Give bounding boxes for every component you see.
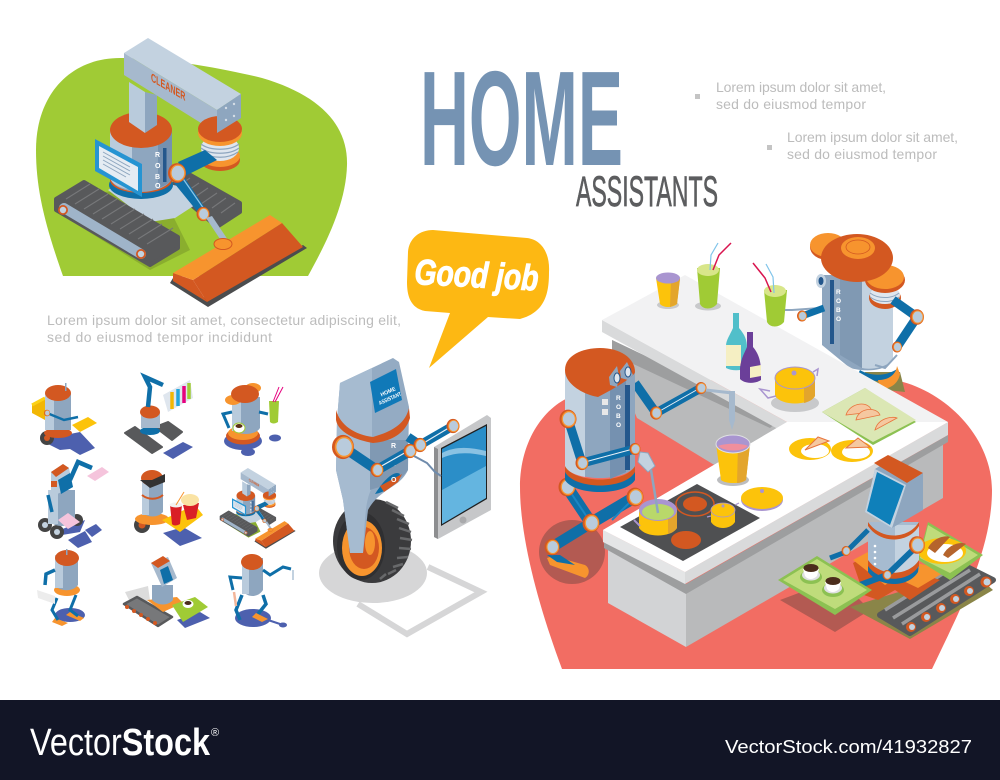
label: CLEANER: CLEANER [151, 70, 186, 104]
pot lid [741, 487, 783, 511]
registered mark: ® [211, 727, 219, 739]
screen label: HOME [380, 386, 397, 398]
ROBO label: O [616, 422, 621, 429]
plates with sandwiches [789, 437, 873, 462]
text block: top note 2: sed do eiusmod tempor [787, 146, 937, 162]
red blob [520, 380, 992, 669]
text block: left description: Lorem ipsum dolor sit amet, consectetur adipiscing elit, [47, 312, 401, 328]
image id: VectorStock.com/41932827 [725, 737, 972, 757]
text block: left description [47, 312, 401, 345]
panel: kitchen scene on red blob [520, 233, 993, 669]
screen label: ASSISTANT [378, 391, 403, 407]
robot: bartender: O [836, 298, 841, 305]
shadow [319, 543, 481, 634]
robot: waiter on tracks [778, 455, 993, 639]
panel: cleaner robot on green blob [36, 38, 347, 307]
text block: top note 2 [767, 129, 958, 162]
counter [602, 275, 948, 647]
small robot: drink server [223, 383, 283, 456]
cleaner robot: B [155, 174, 160, 181]
text block: top note 2: Lorem ipsum dolor sit amet, [787, 129, 958, 145]
small robot: medical [38, 462, 109, 548]
soup pot [634, 499, 677, 536]
robot: bartender: B [836, 307, 841, 314]
cutting board [822, 388, 916, 445]
drinks [656, 243, 824, 326]
robot: bartender: R [836, 289, 841, 296]
cleaner robot [56, 38, 307, 307]
arms [332, 419, 460, 477]
callout: Good job speech bubble [407, 230, 549, 368]
ROBO label: B [616, 413, 621, 420]
subtitle: ASSISTANTS: ASSISTANTS [576, 168, 718, 216]
ROBO label: O [391, 477, 397, 484]
text block: top note 1: Lorem ipsum dolor sit amet, [716, 79, 886, 95]
text block: left description: sed do eiusmod tempor incididunt [47, 329, 272, 345]
robot: home assistant with tablet [319, 358, 491, 634]
robot: bartender: O [836, 316, 841, 323]
ROBO label: O [616, 404, 621, 411]
tablet screen [95, 139, 142, 197]
title: HOME: HOME [420, 43, 623, 194]
icon grid: nine small robots [32, 377, 296, 628]
VectorStock logo: VectorStock [30, 722, 211, 764]
robot: bartender [810, 233, 924, 392]
text block: top note 1: sed do eiusmod tempor [716, 96, 866, 112]
ROBO label: B [391, 461, 396, 468]
cleaner robot: R [155, 152, 160, 159]
small robot: paper delivery [32, 383, 97, 455]
small robot: walking chef [230, 554, 293, 628]
small robot: test tubes [125, 377, 193, 459]
robot shadow [539, 520, 605, 584]
footer bar [0, 700, 1000, 780]
ROBO label [616, 395, 621, 429]
wheel [333, 499, 412, 583]
bottles [726, 313, 761, 383]
text block: top note 1 [695, 79, 886, 112]
large juice cup [716, 435, 750, 486]
yellow pot [760, 367, 819, 412]
robot: cook [544, 348, 735, 578]
small robot: tray on tracks [124, 556, 210, 628]
small pot [707, 503, 739, 528]
robot body [336, 358, 409, 553]
small robot: mini cleaner [220, 468, 296, 549]
callout: Good job speech bubble: Good job [414, 251, 540, 298]
ROBO label: R [616, 395, 621, 402]
ROBO label [391, 443, 397, 484]
stove [620, 484, 760, 561]
small robot: walking with towel [37, 549, 85, 626]
green blob [36, 58, 347, 276]
cleaner robot: O [155, 163, 161, 170]
small robot: popcorn tray [134, 470, 203, 546]
ROBO label: R [391, 443, 396, 450]
cleaner robot: O [155, 183, 161, 190]
tablet [434, 415, 491, 539]
